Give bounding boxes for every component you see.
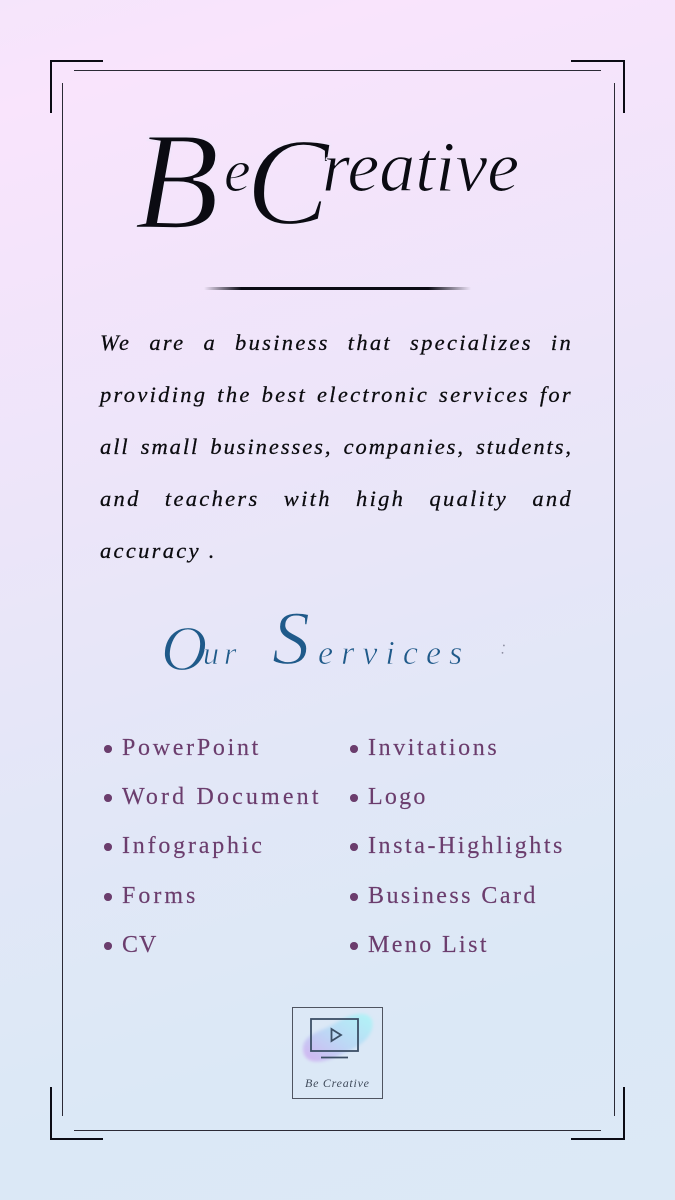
service: Word Document: Word Document: [122, 784, 322, 810]
about text block: and teachers with high quality and: [100, 486, 573, 511]
services list: [104, 735, 565, 958]
about text block: We are a business that specializes in: [100, 330, 573, 355]
services heading: ervices: [318, 635, 470, 672]
about text block: all small businesses, companies, students,: [100, 434, 573, 459]
about text block: providing the best electronic services for: [100, 382, 573, 407]
title: reative: [322, 127, 519, 207]
title: e: [224, 138, 251, 204]
service: Insta-Highlights: Insta-Highlights: [368, 833, 565, 859]
about text block: [98, 330, 573, 563]
services heading: O: [161, 613, 207, 684]
service: Business Card: Business Card: [368, 883, 538, 909]
service: Forms: Forms: [122, 883, 198, 909]
service: Invitations: Invitations: [368, 735, 499, 761]
title: C: [246, 114, 331, 252]
services heading: ur: [203, 635, 241, 671]
service: CV: CV: [122, 932, 157, 958]
about text block: accuracy .: [100, 538, 217, 563]
logo: Be Creative: [305, 1076, 370, 1090]
service: PowerPoint: PowerPoint: [122, 735, 261, 761]
service: Logo: Logo: [368, 784, 428, 810]
logo: [292, 1007, 383, 1099]
services heading: :: [500, 637, 507, 659]
service: CV: [104, 932, 157, 958]
service: Infographic: Infographic: [122, 833, 265, 859]
title divider: [204, 287, 471, 290]
services heading: [161, 605, 507, 684]
service: Meno List: Meno List: [368, 932, 489, 958]
title: [134, 110, 519, 255]
